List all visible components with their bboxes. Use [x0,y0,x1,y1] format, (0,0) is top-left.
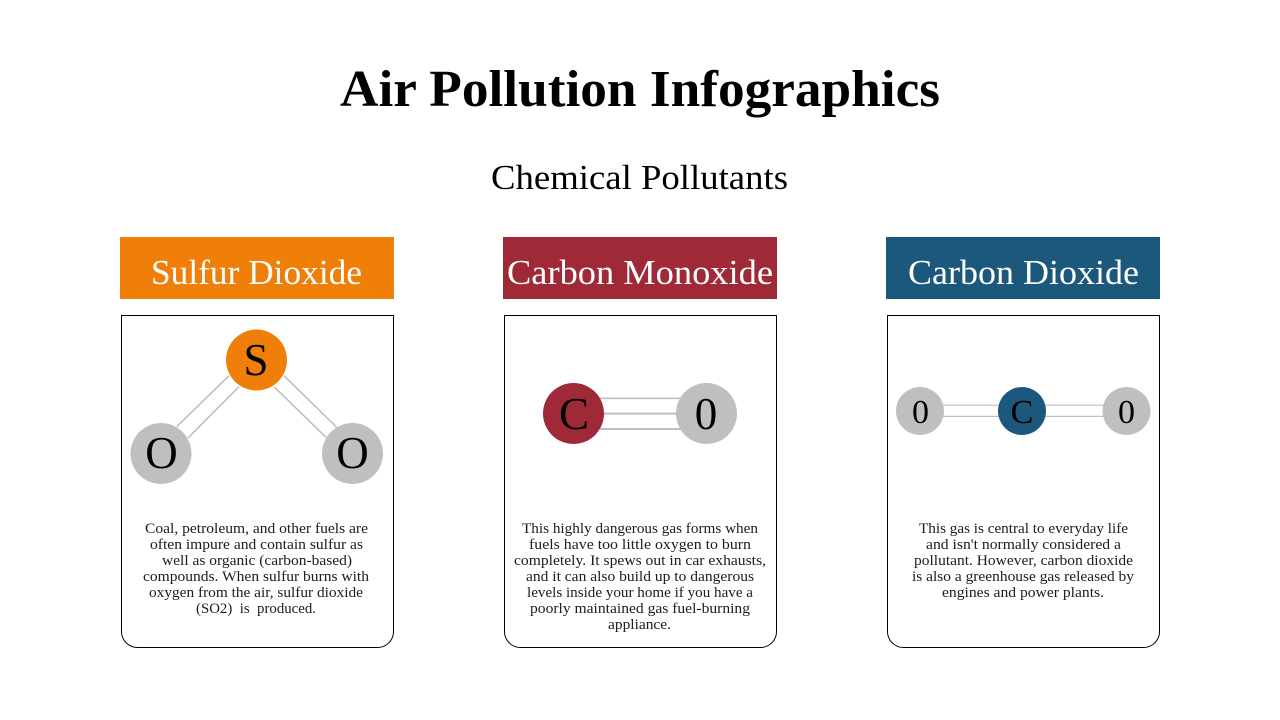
subtitle: Chemical Pollutants [491,158,788,197]
diagram: CO molecule: 0 [695,389,717,439]
text: carbon dioxide description: and isn't normally considered a [926,537,1121,553]
header: sulfur dioxide [120,237,394,299]
diagram: CO2 molecule: C [1011,394,1033,431]
header: carbon monoxide [503,237,777,299]
text: sulfur dioxide description: (SO2) is produced. [196,601,316,617]
text: carbon monoxide description: and it can also build up to dangerous [526,569,754,585]
text: carbon dioxide description [912,521,1135,601]
text: carbon monoxide description: levels inside your home if you have a [527,585,753,601]
title: Air Pollution Infographics [340,61,940,118]
text: sulfur dioxide description [143,521,370,617]
text: carbon dioxide description: engines and power plants. [942,585,1104,601]
diagram: SO2 molecule: O [336,428,369,478]
text: carbon dioxide description: pollutant. However, carbon dioxide [914,553,1133,569]
text: sulfur dioxide description: often impure and contain sulfur as [150,537,363,553]
text: carbon monoxide description [514,521,766,633]
header: sulfur dioxide: Sulfur Dioxide [151,253,362,292]
card outline: sulfur dioxide [122,316,394,648]
text: sulfur dioxide description: oxygen from the air, sulfur dioxide [149,585,363,601]
text: sulfur dioxide description: well as organic (carbon-based) [162,553,352,569]
panel: sulfur dioxide [120,237,394,648]
text: carbon monoxide description: poorly maintained gas fuel-burning [530,601,751,617]
text: carbon monoxide description: completely. It spews out in car exhausts, [514,553,766,569]
diagram: CO2 molecule [896,387,1150,435]
text: carbon dioxide description: is also a greenhouse gas released by [912,569,1135,585]
diagram: CO molecule: C [559,389,589,439]
diagram: CO2 molecule: 0 [1118,394,1135,431]
text: carbon monoxide description: fuels have too little oxygen to burn [529,537,752,553]
text: sulfur dioxide description: Coal, petroleum, and other fuels are [145,521,368,537]
diagram: CO molecule [543,383,737,444]
text: carbon monoxide description: This highly dangerous gas forms when [522,521,758,537]
diagram: CO2 molecule: 0 [912,394,929,431]
panel: carbon monoxide [503,237,777,648]
diagram: SO2 molecule: O [145,428,178,478]
text: carbon dioxide description: This gas is central to everyday life [919,521,1128,537]
header: carbon monoxide: Carbon Monoxide [507,253,773,292]
panel: carbon dioxide [886,237,1160,648]
diagram: SO2 molecule [130,330,383,484]
card outline: carbon monoxide [504,316,776,648]
header: carbon dioxide [886,237,1160,299]
header: carbon dioxide: Carbon Dioxide [908,253,1139,292]
card outline: carbon dioxide [888,316,1160,648]
text: carbon monoxide description: appliance. [608,617,671,633]
text: sulfur dioxide description: compounds. When sulfur burns with [143,569,370,585]
diagram: SO2 molecule: S [243,335,269,385]
